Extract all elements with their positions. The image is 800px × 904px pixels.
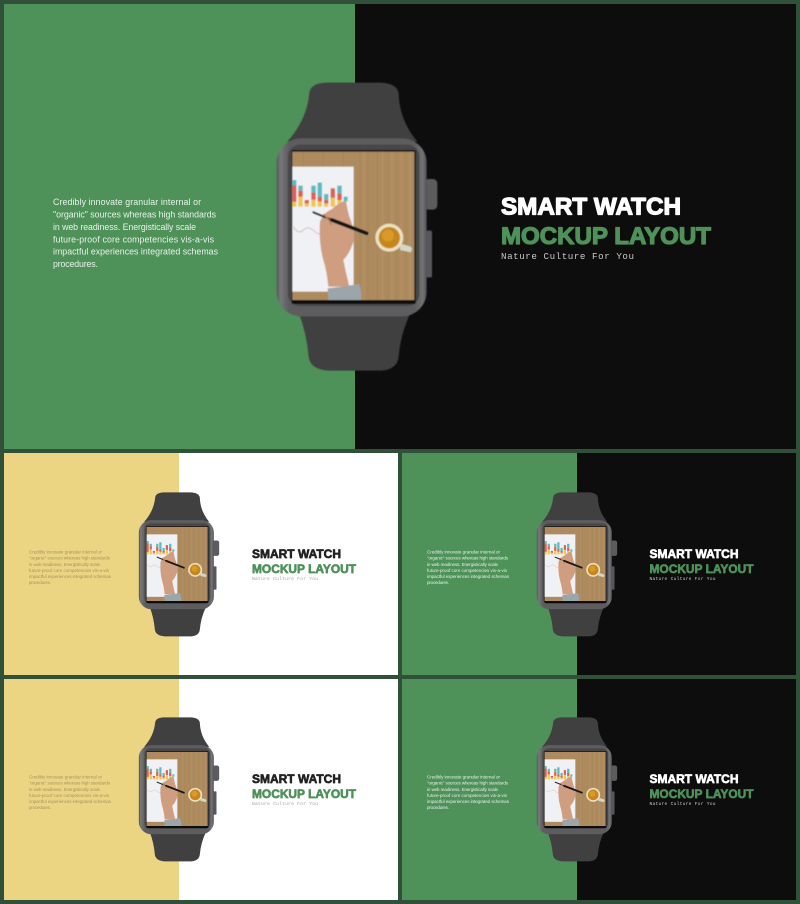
right black half bbox=[577, 679, 796, 900]
right white half bbox=[179, 453, 398, 675]
body text: in web readiness. Energistically scale bbox=[29, 562, 100, 567]
body text: impactful experiences integrated schemas bbox=[29, 799, 112, 804]
body text: impactful experiences integrated schemas bbox=[427, 799, 510, 804]
body text: Credibly innovate granular internal or bbox=[53, 197, 201, 207]
icon: smart watch bbox=[537, 492, 617, 636]
tagline: Nature Culture For You bbox=[650, 801, 716, 807]
right white half bbox=[179, 679, 398, 900]
body text bbox=[29, 774, 112, 810]
tagline: Nature Culture For You bbox=[501, 251, 634, 262]
body text: procedures. bbox=[29, 580, 51, 585]
body text: future-proof core competencies vis-a-vis bbox=[427, 568, 508, 573]
left green half bbox=[402, 453, 577, 675]
body text bbox=[53, 197, 219, 269]
body text bbox=[427, 774, 510, 810]
tagline: Nature Culture For You bbox=[252, 801, 318, 807]
body text: future-proof core competencies vis-a-vis bbox=[53, 234, 215, 244]
body text: "organic" sources whereas high standards bbox=[29, 781, 111, 786]
body text: "organic" sources whereas high standards bbox=[29, 556, 111, 561]
panel: green and black slide top bbox=[402, 453, 796, 675]
body text: Credibly innovate granular internal or bbox=[427, 550, 500, 554]
body text: Credibly innovate granular internal or bbox=[427, 774, 500, 780]
tagline: Nature Culture For You bbox=[650, 576, 716, 582]
heading bbox=[252, 547, 357, 576]
body text: in web readiness. Energistically scale bbox=[427, 562, 498, 567]
heading: SMART WATCH bbox=[252, 772, 341, 786]
body text: "organic" sources whereas high standards bbox=[427, 556, 509, 561]
left green half bbox=[4, 4, 355, 449]
panel: large green and black slide bbox=[4, 4, 796, 449]
heading: MOCKUP LAYOUT bbox=[650, 787, 754, 801]
panel: yellow and white slide bottom bbox=[4, 679, 398, 900]
heading: SMART WATCH bbox=[501, 194, 681, 220]
body text: procedures. bbox=[53, 259, 98, 269]
body text: "organic" sources whereas high standards bbox=[427, 781, 509, 786]
body text: procedures. bbox=[427, 805, 449, 810]
body text: impactful experiences integrated schemas bbox=[53, 247, 219, 257]
right black half bbox=[355, 4, 796, 449]
left yellow half bbox=[4, 453, 179, 675]
heading: MOCKUP LAYOUT bbox=[650, 562, 754, 576]
heading: MOCKUP LAYOUT bbox=[252, 787, 357, 801]
heading: SMART WATCH bbox=[650, 547, 738, 561]
heading bbox=[650, 772, 754, 801]
body text: impactful experiences integrated schemas bbox=[427, 574, 510, 579]
body text: future-proof core competencies vis-a-vis bbox=[427, 793, 508, 798]
body text bbox=[29, 550, 112, 585]
body text: in web readiness. Energistically scale bbox=[29, 787, 100, 792]
heading: MOCKUP LAYOUT bbox=[252, 562, 357, 576]
panel: green and black slide bottom bbox=[402, 679, 796, 900]
body text: impactful experiences integrated schemas bbox=[29, 574, 112, 579]
heading bbox=[650, 547, 754, 576]
heading bbox=[252, 772, 357, 801]
icon: smart watch bbox=[139, 717, 219, 861]
icon: smart watch bbox=[537, 717, 617, 861]
heading: SMART WATCH bbox=[650, 772, 738, 786]
body text: "organic" sources whereas high standards bbox=[53, 210, 217, 220]
heading: MOCKUP LAYOUT bbox=[501, 223, 711, 250]
panel: yellow and white slide top bbox=[4, 453, 398, 675]
left green half bbox=[402, 679, 577, 900]
icon: smart watch bbox=[139, 492, 219, 636]
body text: Credibly innovate granular internal or bbox=[29, 774, 102, 780]
heading bbox=[501, 194, 711, 250]
icon: smart watch bbox=[277, 83, 437, 371]
body text bbox=[427, 550, 510, 585]
tagline: Nature Culture For You bbox=[252, 576, 318, 582]
body text: in web readiness. Energistically scale bbox=[53, 222, 196, 232]
body text: future-proof core competencies vis-a-vis bbox=[29, 568, 110, 573]
left yellow half bbox=[4, 679, 179, 900]
body text: Credibly innovate granular internal or bbox=[29, 550, 102, 554]
right black half bbox=[577, 453, 796, 675]
body text: procedures. bbox=[29, 805, 51, 810]
body text: future-proof core competencies vis-a-vis bbox=[29, 793, 110, 798]
heading: SMART WATCH bbox=[252, 547, 341, 561]
body text: procedures. bbox=[427, 580, 449, 585]
body text: in web readiness. Energistically scale bbox=[427, 787, 498, 792]
